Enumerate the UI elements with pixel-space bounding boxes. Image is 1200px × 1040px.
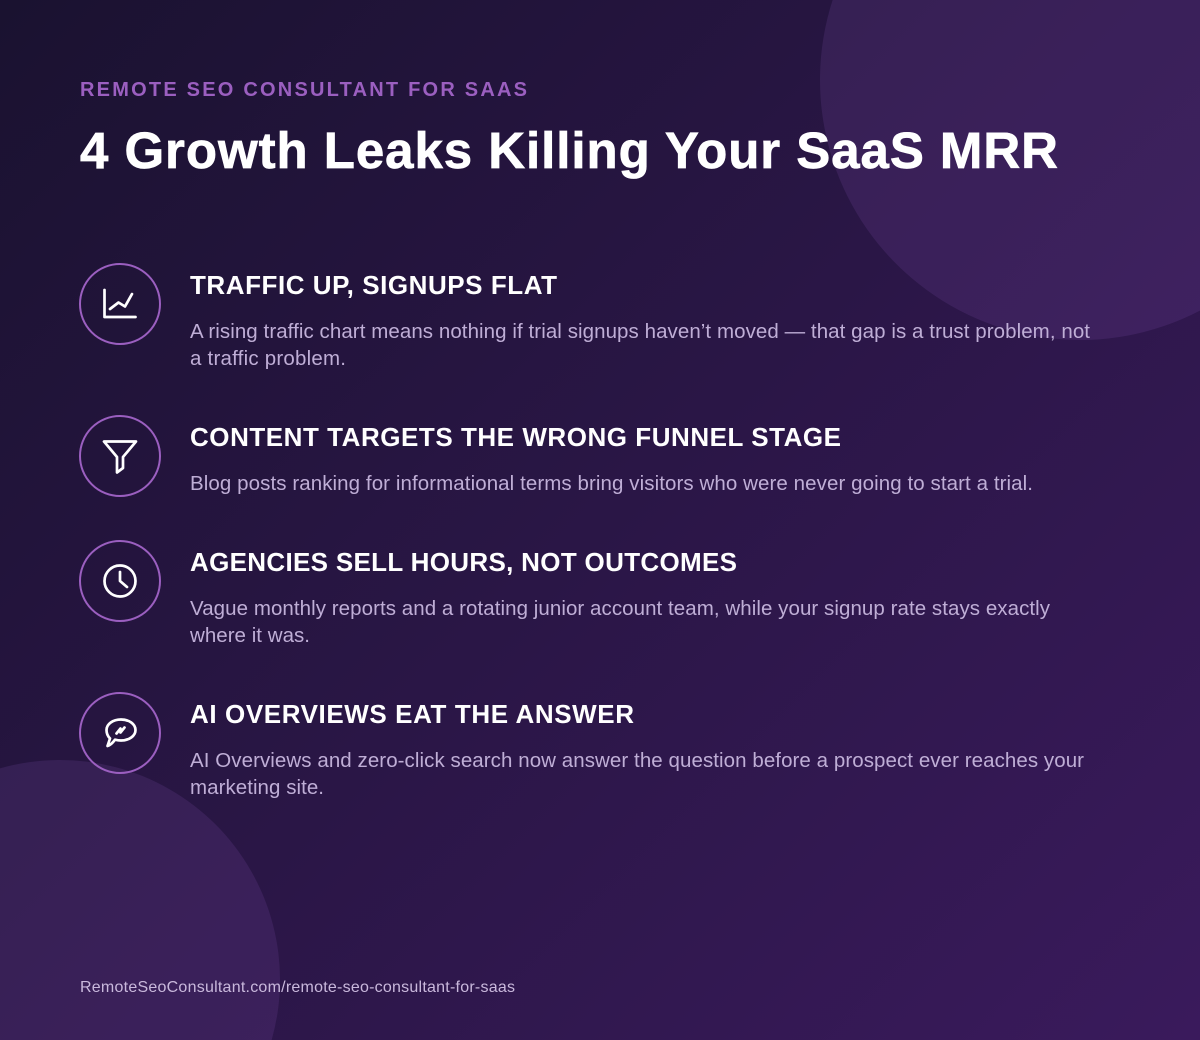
footer url: RemoteSeoConsultant.com/remote-seo-consultant-for-saas: [80, 979, 515, 996]
icon: clock in circle: [80, 541, 160, 621]
item 3: agencies sell hours: [80, 541, 1051, 647]
body: traffic up: [190, 320, 1090, 370]
heading: agencies: AGENCIES SELL HOURS, NOT OUTCOMES: [190, 547, 737, 577]
body: agencies: [189, 597, 1051, 647]
body: AI overviews: [190, 749, 1084, 799]
heading: AI overviews: AI OVERVIEWS EAT THE ANSWER: [190, 699, 634, 729]
heading: funnel: CONTENT TARGETS THE WRONG FUNNEL STAGE: [190, 422, 841, 452]
body: agencies: Vague monthly reports and a rotating junior account team, while your signup rate stays exactly: [190, 597, 1051, 620]
item 4: AI overviews: [80, 693, 1084, 799]
decorative circle: top right: [820, 0, 1200, 340]
item 2: wrong funnel stage: [80, 416, 1033, 496]
body: traffic up: a traffic problem.: [190, 347, 346, 370]
body: agencies: where it was.: [189, 624, 310, 647]
icon: line chart in circle: [80, 264, 160, 344]
body: funnel: Blog posts ranking for informational terms bring visitors who were never going to start a trial.: [190, 472, 1033, 495]
eyebrow label: REMOTE SEO CONSULTANT FOR SAAS: [80, 79, 527, 101]
icon: speech bubble with bolt in circle: [80, 693, 160, 773]
item 1: traffic up, signups flat: [80, 264, 1090, 370]
decorative circle: bottom left: [0, 760, 280, 1040]
heading: traffic up: TRAFFIC UP, SIGNUPS FLAT: [190, 270, 557, 300]
body: traffic up: A rising traffic chart means nothing if trial signups haven’t moved — that gap is a trust problem, not: [190, 320, 1090, 343]
body: AI overviews: marketing site.: [190, 776, 324, 799]
icon: funnel in circle: [80, 416, 160, 496]
title: 4 Growth Leaks Killing Your SaaS MRR: [80, 122, 1058, 179]
body: AI overviews: AI Overviews and zero-click search now answer the question before a prospect ever reaches your: [190, 749, 1084, 772]
